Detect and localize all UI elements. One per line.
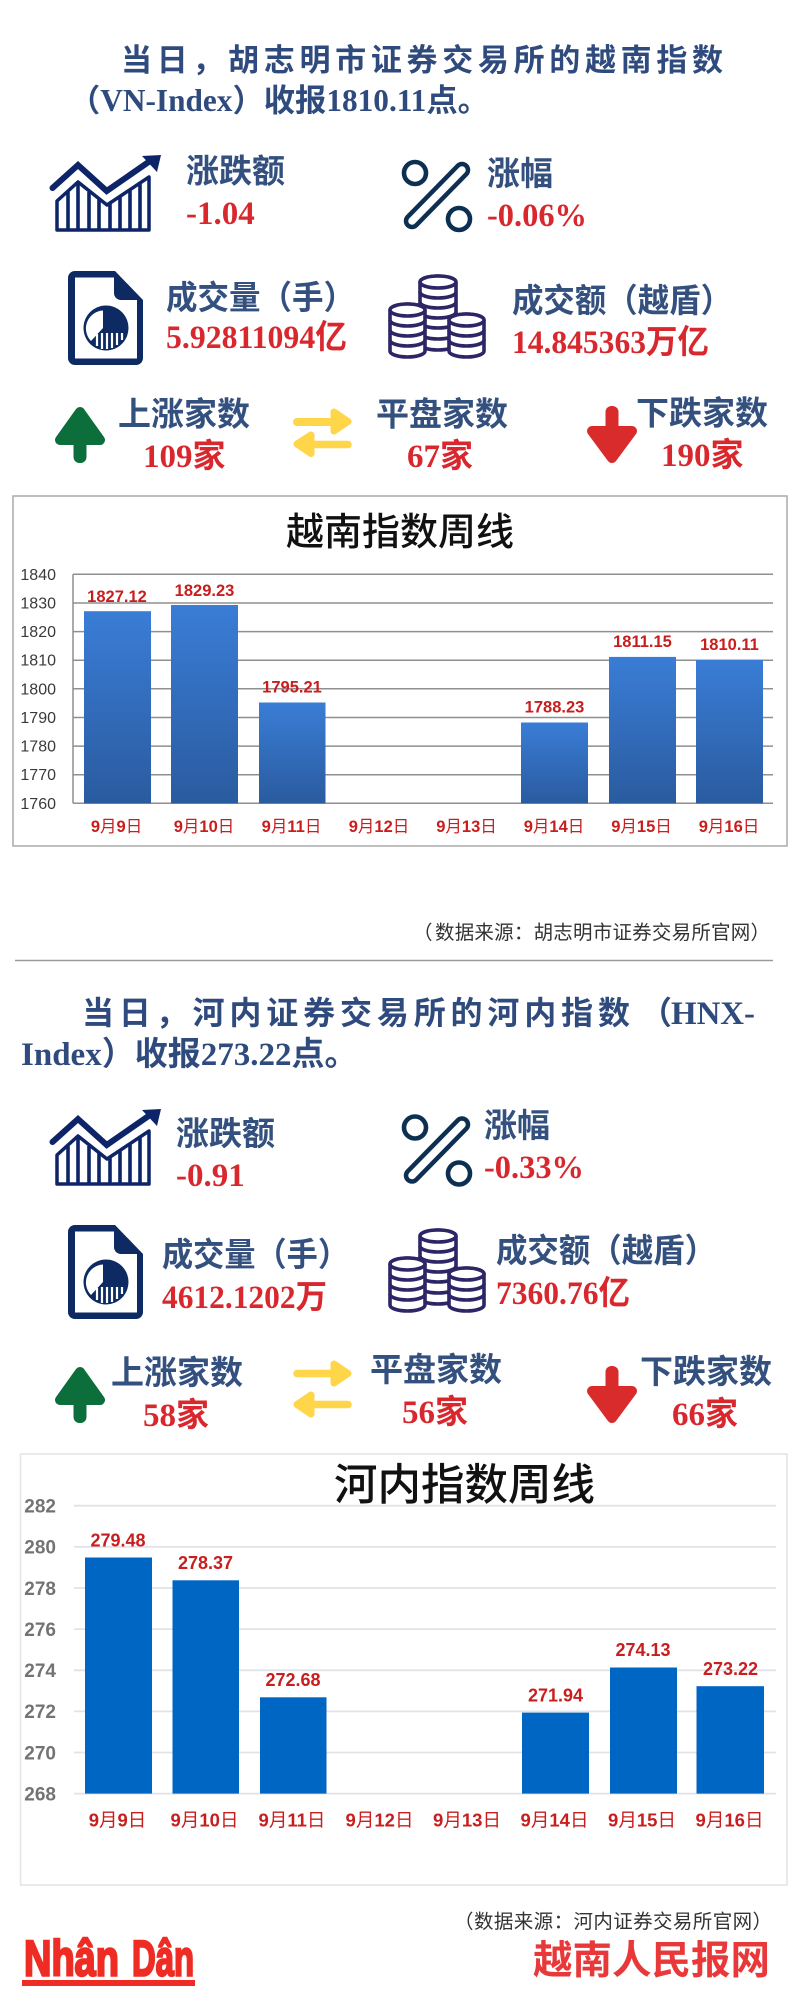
icon: exchange arrows [297, 1364, 348, 1414]
icon: percent [404, 1116, 470, 1184]
x axis labels: 9月13日 [436, 818, 497, 836]
value labels: 1829.23 [175, 582, 234, 600]
stat: change percent: 涨幅 [487, 155, 553, 192]
source note: VN-Index: 数据来源：胡志明市证券交易所官网） [435, 922, 770, 944]
x axis labels [89, 1810, 763, 1830]
x axis labels: 9月11日 [259, 1810, 325, 1830]
bars [84, 605, 763, 803]
stat: turnover [496, 1232, 716, 1312]
gridlines and y axis: 272 [24, 1702, 56, 1723]
value labels: 1788.23 [525, 699, 584, 717]
stat: turnover [512, 282, 732, 361]
x axis labels: 9月14日 [521, 1810, 588, 1830]
x axis labels: 9月9日 [91, 818, 142, 836]
stat: volume [162, 1236, 349, 1316]
heading: VN-Index close [69, 43, 723, 118]
value labels: 1795.21 [262, 679, 322, 697]
gridlines and y axis: 1830 [20, 596, 56, 612]
brand text: 越南人民报网 [533, 1939, 770, 1983]
stat: turnover: 成交额（越盾） [496, 1232, 716, 1269]
x axis labels: 9月16日 [699, 818, 759, 836]
panel: VN-Index weekly chart [13, 496, 787, 846]
stat: unchanged [376, 396, 508, 475]
heading: HNX-Index close [21, 995, 755, 1073]
value labels: 274.13 [615, 1640, 671, 1660]
stat: change percent: 涨幅 [484, 1107, 550, 1144]
x axis labels: 9月16日 [696, 1810, 763, 1830]
heading: VN-Index close: 当日，胡志明市证券交易所的越南指数 [121, 43, 723, 78]
stat: unchanged [370, 1351, 502, 1431]
stat: turnover: 14.845363万亿 [512, 324, 709, 361]
stat: decliners [640, 1353, 772, 1433]
value labels: 271.94 [528, 1686, 583, 1706]
gridlines and y axis: 274 [24, 1661, 56, 1682]
source note: VN-Index: （ [413, 922, 433, 944]
stat: unchanged: 平盘家数 [370, 1351, 502, 1388]
logo: Nhan Dan: Dân [132, 1930, 194, 1986]
stat: change percent [487, 155, 587, 234]
stat: volume: 成交量（手） [162, 1236, 349, 1273]
icon: down arrow [592, 406, 632, 458]
stat: volume: 4612.1202万 [162, 1280, 327, 1316]
value labels: 278.37 [178, 1553, 233, 1573]
chart title: 河内指数周线 [334, 1462, 595, 1510]
stat: change amount: 涨跌额 [186, 152, 285, 190]
bars [85, 1558, 764, 1794]
stat: advancers [118, 396, 250, 475]
value labels: 1827.12 [87, 588, 147, 606]
gridlines and y axis [24, 1496, 776, 1805]
gridlines and y axis: 1820 [20, 624, 56, 641]
stat: unchanged: 67家 [407, 438, 473, 475]
icon: coin stacks [390, 276, 484, 357]
gridlines and y axis: 1800 [20, 681, 56, 698]
value labels: 273.22 [703, 1659, 758, 1679]
heading: HNX-Index close: （ [640, 995, 672, 1031]
heading: VN-Index close: （VN-Index）收报1810.11点。 [69, 83, 489, 118]
section: VN-Index summary [52, 43, 768, 475]
stat: change amount [186, 152, 285, 232]
icon: exchange arrows [297, 412, 348, 454]
stat: unchanged: 平盘家数 [376, 396, 508, 432]
icon: up arrow [60, 1372, 100, 1423]
x axis labels: 9月12日 [346, 1810, 413, 1830]
stat: change percent: -0.33% [484, 1150, 584, 1186]
gridlines and y axis: 280 [24, 1538, 56, 1559]
stat: turnover: 7360.76亿 [496, 1275, 630, 1312]
icon: line chart [52, 155, 161, 230]
icon: percent [404, 162, 470, 230]
section: HNX-Index summary [21, 995, 772, 1434]
stat: decliners: 190家 [661, 437, 744, 474]
gridlines and y axis: 278 [24, 1579, 56, 1600]
value labels [87, 582, 759, 717]
x axis labels: 9月15日 [608, 1810, 676, 1830]
x axis labels: 9月9日 [89, 1810, 146, 1830]
gridlines and y axis: 1840 [20, 567, 56, 584]
icon: up arrow [60, 412, 100, 463]
stat: volume: 5.92811094亿 [166, 319, 347, 356]
stat: advancers: 上涨家数 [118, 396, 250, 432]
gridlines and y axis: 1770 [20, 767, 56, 784]
panel: HNX-Index weekly chart [20, 1454, 787, 1885]
icon: coin stacks [390, 1230, 484, 1311]
stat: change amount: 涨跌额 [176, 1115, 275, 1152]
stat: volume [166, 279, 355, 356]
stat: change amount: -1.04 [186, 196, 255, 232]
x axis labels: 9月14日 [524, 818, 584, 836]
source note: HNX-Index: 数据来源：河内证券交易所官网） [474, 1911, 772, 1933]
x axis labels: 9月15日 [611, 818, 672, 836]
stat: change percent: -0.06% [487, 198, 587, 234]
icon: down arrow [592, 1366, 632, 1418]
heading: HNX-Index close: Index）收报273.22点。 [21, 1036, 357, 1073]
gridlines and y axis: 268 [24, 1784, 56, 1805]
heading: HNX-Index close: 当日，河内证券交易所的河内指数 [82, 995, 630, 1031]
source note: HNX-Index: （ [454, 1911, 474, 1933]
stat: change amount [176, 1115, 275, 1194]
stat: decliners: 下跌家数 [640, 1353, 772, 1390]
x axis labels: 9月12日 [349, 818, 409, 836]
gridlines and y axis: 1780 [20, 739, 56, 756]
stat: decliners [636, 394, 768, 474]
gridlines and y axis: 1810 [20, 653, 56, 670]
x axis labels: 9月13日 [433, 1810, 501, 1830]
value labels: 1810.11 [700, 636, 759, 654]
heading: HNX-Index close: HNX- [671, 996, 755, 1032]
stat: turnover: 成交额（越盾） [512, 282, 732, 319]
value labels: 272.68 [265, 1670, 321, 1690]
stat: advancers: 109家 [143, 438, 226, 475]
stat: advancers: 上涨家数 [111, 1354, 243, 1391]
logo: Nhan Dan: Nhân [24, 1930, 119, 1986]
icon: line chart [52, 1109, 161, 1184]
gridlines and y axis: 1790 [20, 710, 56, 727]
gridlines and y axis: 282 [24, 1496, 56, 1518]
stat: volume: 成交量（手） [166, 279, 355, 316]
gridlines and y axis: 1760 [20, 796, 56, 813]
stat: advancers: 58家 [143, 1397, 209, 1434]
stat: decliners: 下跌家数 [636, 394, 768, 432]
x axis labels: 9月10日 [171, 1810, 238, 1830]
value labels: 279.48 [90, 1530, 146, 1550]
x axis labels [91, 818, 759, 836]
stat: unchanged: 56家 [402, 1394, 468, 1431]
gridlines and y axis: 270 [24, 1743, 56, 1764]
stat: advancers [111, 1354, 243, 1434]
stat: change amount: -0.91 [176, 1158, 245, 1194]
value labels [90, 1530, 758, 1706]
icon: document with pie chart [68, 271, 143, 365]
value labels: 1811.15 [613, 633, 672, 651]
gridlines and y axis [20, 567, 773, 813]
stat: decliners: 66家 [672, 1396, 738, 1433]
x axis labels: 9月10日 [174, 818, 234, 836]
stat: change percent [484, 1107, 584, 1186]
x axis labels: 9月11日 [262, 818, 321, 836]
chart title: 越南指数周线 [286, 512, 514, 554]
icon: document with pie chart [68, 1225, 143, 1319]
gridlines and y axis: 276 [24, 1620, 56, 1641]
